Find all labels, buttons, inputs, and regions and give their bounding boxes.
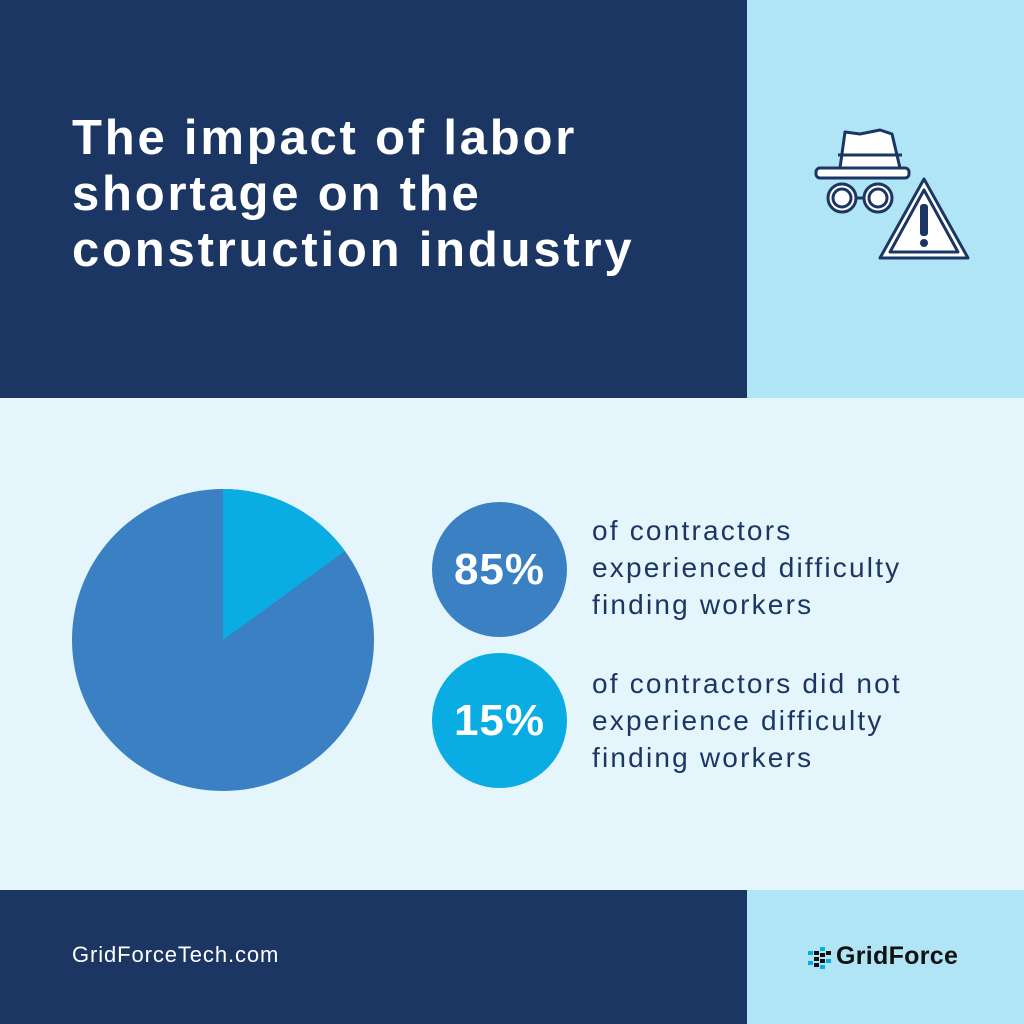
footer light <box>747 890 1024 1024</box>
description 85: finding workers <box>592 589 813 620</box>
pie chart <box>72 489 374 791</box>
header panel dark <box>0 0 747 398</box>
description 85: of contractors <box>592 515 792 546</box>
description 85 <box>592 515 901 620</box>
website url: GridForceTech.com <box>72 942 279 967</box>
badge 15 <box>432 653 567 788</box>
description 15: finding workers <box>592 742 813 773</box>
badge 15: 15% <box>454 696 545 745</box>
stat 85% <box>432 502 901 637</box>
logo: GridForce <box>836 942 958 970</box>
header panel light <box>747 0 1024 398</box>
title <box>72 111 634 277</box>
stat 15% <box>432 653 902 788</box>
icon: spy with warning <box>814 128 970 260</box>
description 15: of contractors did not <box>592 668 902 699</box>
description 15: experience difficulty <box>592 705 884 736</box>
title: construction industry <box>72 223 634 277</box>
badge 85 <box>432 502 567 637</box>
title: The impact of labor <box>72 111 577 165</box>
description 85: experienced difficulty <box>592 552 901 583</box>
footer dark <box>0 890 747 1024</box>
badge 85: 85% <box>454 545 545 594</box>
description 15 <box>592 668 902 773</box>
title: shortage on the <box>72 167 482 221</box>
